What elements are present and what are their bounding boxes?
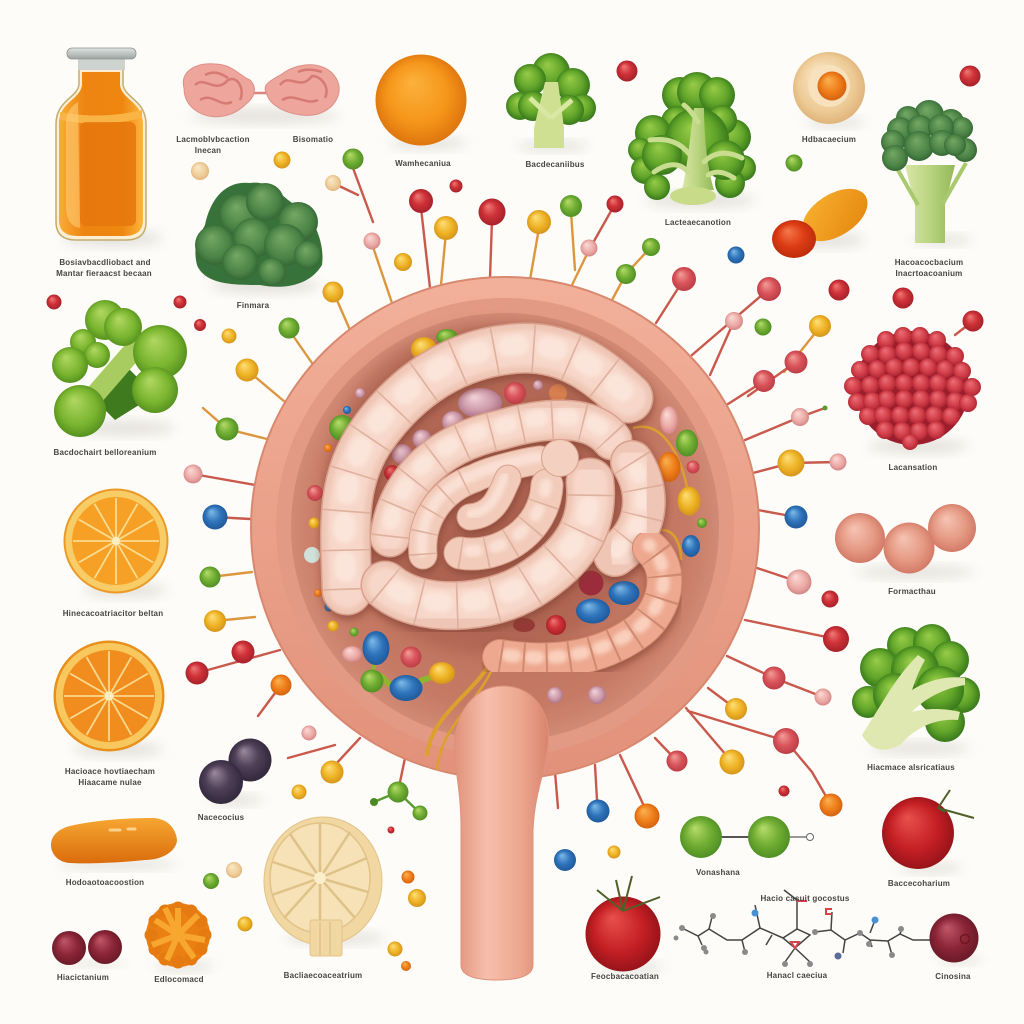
spoke lower right [686, 708, 744, 774]
icon: tomato bottom [586, 876, 664, 972]
label slice two: Hacioace hovtiaecham [65, 767, 155, 776]
spoke top right [656, 267, 696, 323]
icon: green broccoli [52, 300, 187, 437]
label sausage: Hodoaotoacoostion [66, 878, 144, 887]
yellow vessels [427, 662, 495, 770]
spoke left [186, 640, 280, 684]
spoke right [758, 506, 808, 528]
icon: dark broccoli tree [881, 100, 977, 245]
spoke right [748, 350, 808, 396]
label slice two b: Hiaacame nulae [78, 778, 142, 787]
icon: maroon berries [52, 930, 126, 967]
icon: lettuce broccoli [628, 72, 756, 207]
label salmon: Formacthau [888, 587, 936, 596]
floor shade [325, 325, 655, 655]
small intestine coils [344, 345, 644, 606]
icon: red raspberry [844, 327, 981, 453]
outer wall disc [251, 277, 759, 779]
spoke top [325, 148, 373, 222]
spoke lower left [258, 674, 292, 716]
icon: green dumbbell molecule [680, 816, 814, 858]
spoke lower left [320, 738, 360, 784]
spoke lower right [688, 711, 812, 772]
icon: dark red ball [930, 914, 982, 964]
label jar: Bosiavbacdliobact and [59, 258, 151, 267]
icon: dark plums [199, 738, 272, 805]
spoke right [692, 277, 781, 375]
icon: broccoli right [852, 624, 980, 754]
label clump: Finmara [237, 301, 270, 310]
spoke left [322, 282, 350, 330]
label berries: Hiacictanium [57, 973, 109, 982]
spoke right [757, 568, 812, 594]
icon: orange ball [376, 54, 466, 149]
spoke top [478, 198, 506, 278]
icon: orange sausage [51, 818, 178, 869]
spoke top [409, 189, 433, 288]
label lettuce: Lacteaecanotion [665, 218, 731, 227]
spoke top [560, 195, 582, 270]
icon: orange jar [56, 48, 162, 246]
spoke bottom [655, 738, 688, 772]
spoke left [236, 358, 285, 402]
labels [53, 135, 971, 984]
right coil [614, 459, 644, 555]
floor organelles and vessels [304, 329, 707, 704]
label brain right: Bisomatio [293, 135, 333, 144]
spoke right [745, 406, 828, 440]
spoke right [753, 450, 846, 476]
label tree two: Inacrtoacoanium [895, 269, 963, 278]
label tomato: Baccecoharium [888, 879, 950, 888]
label dark ball: Cinosina [935, 972, 971, 981]
jar liquid [59, 72, 143, 236]
spoke bottom [620, 755, 660, 828]
label right broccoli: Hiacmace alsricatiaus [867, 763, 955, 772]
label chem bottom: Hanacl caeciua [767, 971, 828, 980]
icon: light broccoli [506, 53, 596, 151]
label cream cell: Hdbacaecium [802, 135, 856, 144]
chemical chain diagram [674, 890, 932, 967]
spoke top [527, 210, 551, 280]
label tree: Hacoacocbacium [895, 258, 963, 267]
label orange slice: Hinecacoatriacitor beltan [63, 609, 163, 618]
spoke top right [612, 238, 660, 300]
centre loop [470, 477, 508, 517]
label plums: Nacecocius [198, 813, 245, 822]
icon: dark green clump [195, 183, 323, 293]
spoke left [202, 504, 250, 530]
spoke right [745, 620, 849, 652]
icon: red and orange capsule [772, 178, 877, 258]
label dumbbell: Vonashana [696, 868, 740, 877]
second coil [389, 417, 612, 537]
label jar two: Mantar fieraacst becaan [56, 269, 152, 278]
label green broccoli: Bacdochairt belloreanium [53, 448, 157, 457]
spoke left [204, 610, 255, 632]
spoke left [278, 318, 312, 363]
icon: pink brain halves [183, 64, 340, 123]
label raspberry: Lacansation [889, 463, 937, 472]
centre ball [542, 440, 578, 476]
label flower ball: Edlocomacd [154, 975, 204, 984]
neck stem [454, 686, 549, 980]
jar cap [78, 58, 125, 70]
spoke top [364, 232, 392, 303]
spoke lower right [812, 772, 842, 816]
spoke right [784, 315, 831, 372]
inner coil [422, 457, 540, 555]
spoke lower right [708, 688, 747, 720]
spoke left [184, 464, 255, 485]
gut diagram [251, 277, 759, 980]
spoke bottom [555, 772, 558, 808]
spoke left [200, 566, 252, 588]
label tomato two: Feocbacacoatian [591, 972, 659, 981]
label cream disc: Bacliaecoaceatrium [284, 971, 362, 980]
spoke left [203, 408, 267, 440]
spoke lower left [288, 726, 335, 758]
icon: orange slice two [54, 640, 164, 756]
spoke bottom [586, 765, 610, 822]
floor [291, 313, 719, 741]
colon section [499, 545, 664, 660]
bottom coil [384, 479, 591, 606]
spoke bottom molecule [370, 758, 428, 820]
icon: cream cell with orange center [793, 52, 865, 127]
icon: cream citrus disc [264, 817, 385, 956]
label brain: Lacmoblvbcaction [176, 135, 250, 144]
spoke right [727, 656, 832, 706]
icon: salmon spheres [835, 504, 976, 578]
outer coil [344, 345, 628, 590]
spoke top [434, 216, 458, 285]
inner rim [276, 298, 734, 756]
label brain two: Inecan [195, 146, 221, 155]
jar glass [56, 68, 146, 240]
label light broccoli: Bacdecaniibus [525, 160, 585, 169]
icon: orange slice one [64, 488, 168, 597]
spoke right [728, 370, 775, 404]
label chem top: Hacio casuit gocostus [760, 894, 850, 903]
icon: tomato right [882, 790, 974, 873]
inner curl [459, 482, 547, 554]
icon: orange flower ball [144, 902, 214, 971]
spoke top [572, 196, 624, 285]
label orange ball: Wamhecaniua [395, 159, 451, 168]
